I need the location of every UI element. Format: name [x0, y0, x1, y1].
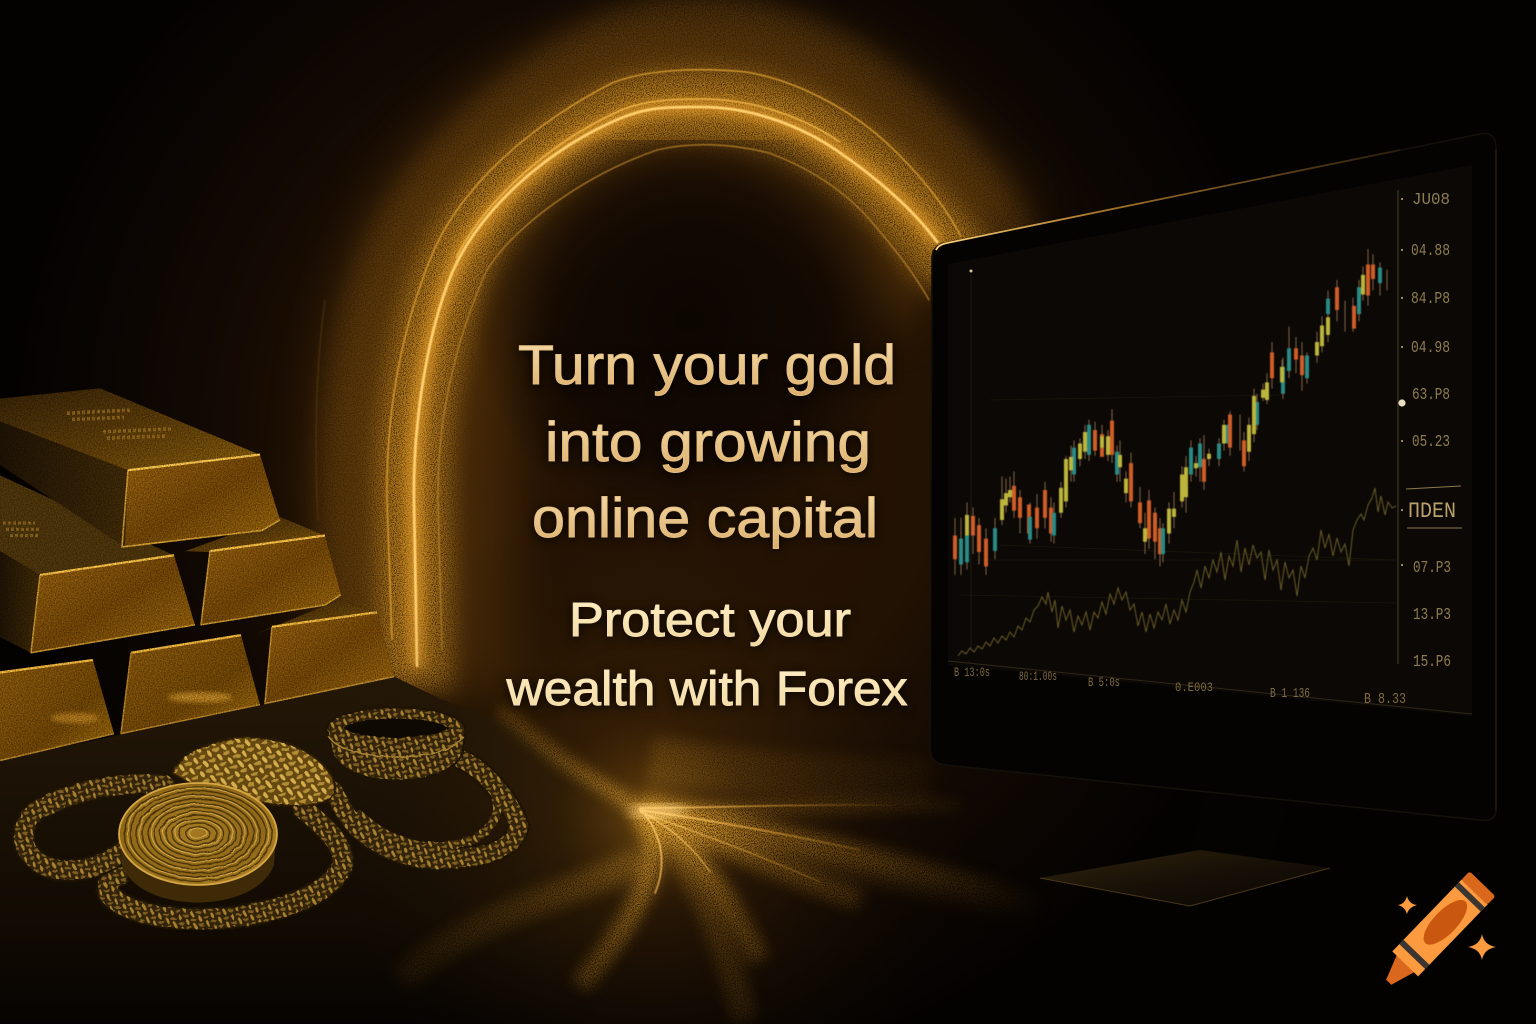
dark table surface — [0, 677, 656, 1024]
bar: bottom middle — [121, 635, 260, 734]
headline: online capital — [532, 486, 878, 549]
time axis labels — [954, 665, 1406, 708]
price axis labels: JU08 — [1412, 191, 1450, 210]
light rays fan — [640, 805, 890, 893]
price axis labels: 84.P8 — [1411, 290, 1450, 309]
candlestick chart — [955, 249, 1387, 575]
bar: top — [0, 388, 280, 547]
time axis labels: 0.E003 — [1175, 680, 1213, 695]
gold coin — [119, 783, 277, 902]
time axis labels: B 5:0s — [1088, 675, 1120, 690]
screen — [948, 165, 1472, 716]
price axis labels: 07.P3 — [1413, 559, 1451, 578]
price axis labels: 13.P3 — [1413, 606, 1451, 625]
sparkle large — [1468, 934, 1496, 960]
price axis labels: 04.98 — [1411, 339, 1450, 358]
floor glow — [300, 480, 1000, 1024]
price axis labels: 05.23 — [1412, 433, 1450, 452]
golden arch of light — [316, 44, 1000, 690]
subheadline: wealth with Forex — [505, 663, 908, 716]
bar: bottom right — [255, 600, 394, 704]
icon: crayon logo — [1375, 871, 1496, 994]
ring — [327, 708, 465, 780]
price marker dot — [1398, 399, 1406, 407]
monitor body — [930, 134, 1496, 820]
price axis labels: 04.88 — [1411, 242, 1450, 261]
crayon — [1375, 871, 1495, 994]
lower line chart — [958, 488, 1396, 656]
time axis labels: B 13:0s — [954, 665, 990, 680]
price axis labels: ΠDEN — [1408, 499, 1456, 524]
headline: Turn your gold — [518, 333, 896, 396]
grainy fan of light — [400, 710, 1140, 1020]
floor with light rays — [0, 480, 1140, 1024]
price axis labels: 63.P8 — [1412, 386, 1450, 405]
bar: middle right — [185, 517, 341, 625]
gold bars stack — [0, 388, 394, 761]
rope: right loop — [334, 759, 519, 860]
time axis labels: B 8.33 — [1364, 691, 1406, 708]
bar: middle left — [0, 475, 195, 653]
gold rope chains — [24, 708, 519, 919]
price axis labels — [1401, 191, 1462, 672]
price axis labels: 15.P6 — [1413, 653, 1451, 672]
ray origin flare — [628, 805, 688, 817]
candle wicks — [955, 249, 1387, 575]
monitor — [930, 134, 1496, 906]
dark interior — [470, 140, 910, 540]
teal candles — [961, 268, 1380, 564]
time axis labels: 80:1.00s — [1019, 669, 1057, 684]
chart grid — [948, 190, 1472, 714]
orange candles — [955, 264, 1373, 567]
subheadline: Protect your — [569, 594, 851, 647]
sparkle small — [1398, 896, 1417, 914]
subheadline — [505, 594, 908, 716]
rope: left loop — [24, 784, 165, 870]
headline: into growing — [545, 410, 871, 473]
crosshair dot — [970, 270, 972, 272]
time axis labels: B 1 136 — [1270, 686, 1310, 702]
rope: thick top strand — [172, 737, 335, 806]
bar: bottom left — [0, 660, 114, 761]
monitor top edge highlight — [936, 150, 1400, 250]
headline — [518, 333, 896, 549]
monitor stand — [1040, 795, 1330, 906]
yellow candles — [967, 275, 1363, 542]
rope: lower loop — [107, 809, 343, 919]
